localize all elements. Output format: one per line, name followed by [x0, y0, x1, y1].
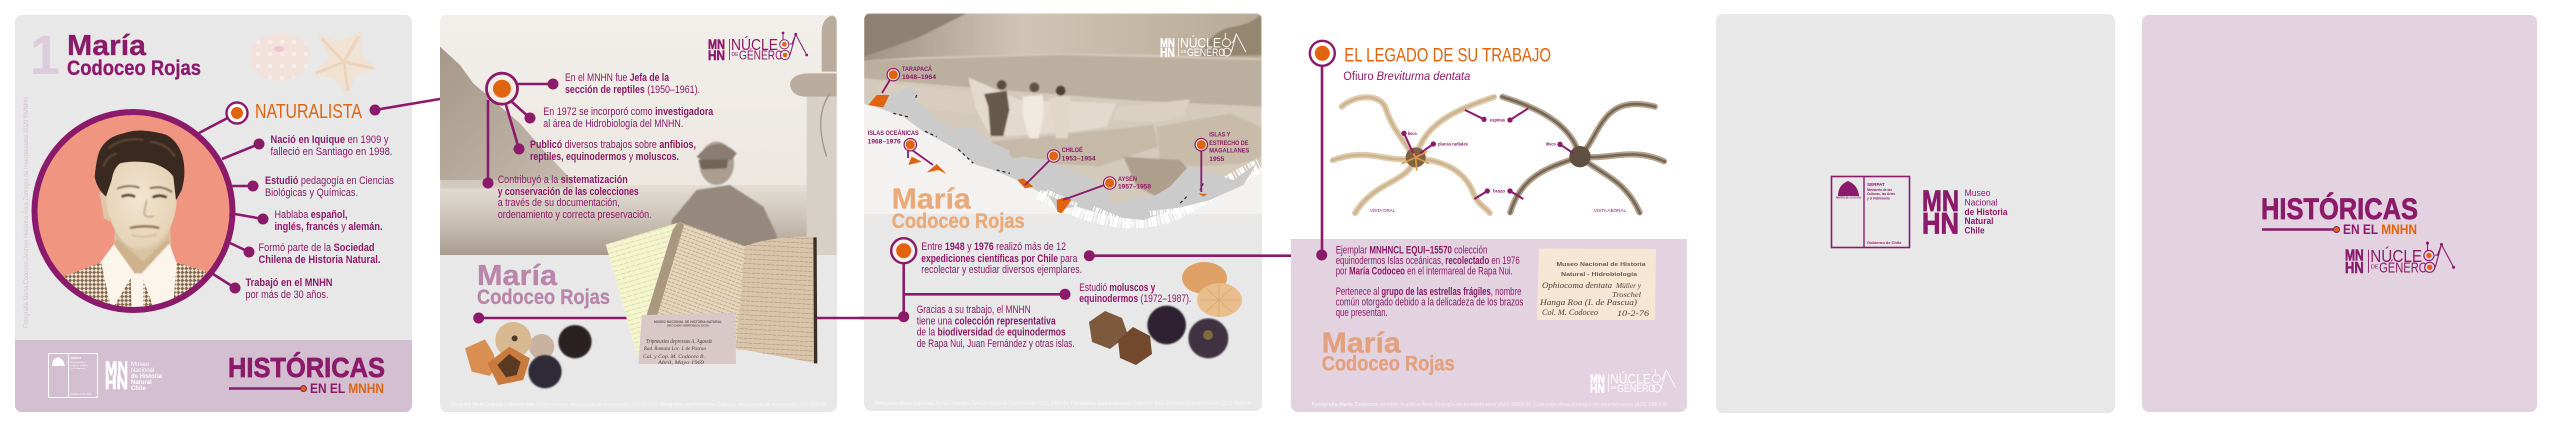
- text: head of section: sección de reptiles (1950–1961).: [565, 84, 700, 96]
- name: María Codoceo Rojas: Codoceo Rojas: [1322, 352, 1455, 376]
- target marker: [1310, 41, 1335, 66]
- text: languages: [274, 209, 382, 233]
- name: María Codoceo Rojas: María: [1322, 327, 1402, 359]
- marker: Islas Oceánicas: 1968–1976: [868, 139, 901, 145]
- anatomy callout lines: [1402, 108, 1573, 199]
- connector lines: [488, 84, 552, 183]
- catalog card: SECCION HIDROBIOLOGIA: [667, 324, 710, 328]
- map connector lines: [882, 75, 1201, 200]
- logo: Serpat: Culturas, las Artes: [1867, 192, 1895, 196]
- brows, eyes, nose, mouth: [117, 186, 172, 237]
- anatomy labels: espinas: [1490, 118, 1506, 122]
- title: María Codoceo Rojas: [67, 30, 201, 80]
- number 1: 1: [30, 23, 60, 86]
- catalog card: Rad. Romaza Loc. I. de Pascua: [643, 346, 706, 352]
- logo: MNHN white: HN: [105, 373, 128, 394]
- wordmark: Históricas en el MNHN: HISTÓRICAS: [228, 352, 385, 383]
- text: specimen: [1336, 244, 1520, 278]
- text: birth: [270, 134, 392, 158]
- logo: MNHN white: [105, 359, 163, 394]
- marker: Tarapacá: TARAPACÁ: [902, 66, 933, 73]
- marker: Tarapacá: [887, 66, 937, 81]
- connector to next panel: [479, 317, 903, 319]
- text: collection: tiene una colección representativa: [917, 315, 1056, 327]
- logo: MNHN white: Natural: [131, 380, 152, 386]
- name: María Codoceo Rojas: [477, 260, 610, 309]
- text: studies: Biológicas y Químicas.: [265, 187, 358, 199]
- jacket: [64, 262, 206, 304]
- marker: Aysén: AYSÉN: [1118, 175, 1137, 183]
- wordmark: Históricas en el MNHN: [228, 352, 385, 396]
- photo credit: Fotografía María Codoceo: Archivo Histórico Área Zoología de Invertebrados 0020 ®MNHN: [23, 97, 30, 328]
- logo: Núcleo de Género white: HN: [1160, 45, 1175, 59]
- logo: MNHN: Chile: [1964, 224, 1984, 236]
- logo: Serpat white: Ministerio de las: [70, 361, 87, 364]
- text: society: Formó parte de la Sociedad: [258, 242, 374, 254]
- logo: Núcleo de Género white: [1590, 369, 1676, 395]
- text: publications: Publicó diversos trabajos sobre anfibios,: [530, 139, 696, 151]
- specimen label card: [1537, 248, 1656, 320]
- background photo: [864, 13, 1262, 220]
- marker: Islas y Estrecho de Magallanes: [1195, 133, 1249, 163]
- panel: closing wordmark: [2142, 15, 2537, 412]
- logo: MNHN white: Museo: [131, 362, 150, 368]
- connector line: [1321, 60, 1323, 255]
- logo: MNHN white: de Historia: [131, 374, 163, 380]
- ear: [99, 192, 110, 222]
- logo: Núcleo de Género: [708, 32, 808, 63]
- logo: MNHN white: Nacional: [131, 368, 154, 374]
- photo credit: Fotografía María Codoceo: Archivo Histórico Área Zoología de Invertebrados (AZI) ®MNHN. Colección Área Zoología de Invertebrados (AZI) ®MNHN: [1312, 401, 1668, 408]
- text: collections: [498, 174, 652, 221]
- logo: Núcleo de Género: GÉNERO: [2379, 259, 2427, 276]
- logo: Serpat: SERPAT: [1867, 182, 1885, 187]
- name: María Codoceo Rojas: [1322, 327, 1455, 376]
- text: birth: Nació en Iquique en 1909 y: [270, 134, 389, 146]
- logo: Núcleo de Género white: MN: [1590, 372, 1605, 386]
- catalog card: [643, 320, 722, 366]
- logo: Serpat white: Culturas, las Artes: [70, 364, 89, 367]
- specimen label card: Natural - Hidrobiología: [1561, 272, 1638, 278]
- title: María Codoceo Rojas: Codoceo Rojas: [67, 57, 201, 80]
- logo: Serpat white: Gobierno de Chile: [70, 392, 92, 396]
- text: researcher: En 1972 se incorporó como investigadora: [543, 106, 714, 118]
- text: specimen: Ejemplar MNHNCL EQUI–15570 colección: [1336, 244, 1487, 256]
- text: society: Chilena de Historia Natural.: [258, 254, 380, 266]
- marker: Aysén: [1104, 175, 1152, 191]
- marker: Chiloé: CHILOÉ: [1062, 146, 1083, 154]
- specimen label card: Hanga Roa (I. de Pascua): [1539, 298, 1637, 307]
- text: studies: [265, 175, 394, 199]
- text: molluscs: equinodermos (1972–1987).: [1079, 293, 1191, 305]
- logo: Serpat: y el Patrimonio: [1867, 196, 1890, 200]
- logo: Núcleo de Género: HN: [2345, 260, 2364, 277]
- text: brittle stars: Pertenece al grupo de las estrellas frágiles, nombre: [1336, 286, 1521, 298]
- catalog card: Tripneustes depressus A. Agassiz: [646, 338, 712, 345]
- logo: Serpat: Gobierno de Chile: [1867, 240, 1902, 245]
- logo: Serpat: [1832, 176, 1910, 248]
- text: languages: Hablaba español,: [274, 209, 348, 221]
- logo: Núcleo de Género white: NÚCLE: [1610, 371, 1651, 387]
- icon: starfish: [313, 33, 376, 95]
- catalog card: Abril, Mayo 1969: [657, 360, 704, 366]
- connector dot: [1316, 250, 1327, 260]
- panel: biography: [15, 15, 487, 412]
- person silhouette: [672, 142, 777, 255]
- wordmark: Históricas en el MNHN: HISTÓRICAS: [2261, 192, 2418, 226]
- panel: legacy: [1291, 41, 1687, 412]
- logo: Núcleo de Género white: HN: [1590, 381, 1605, 395]
- text: languages: inglés, francés y alemán.: [274, 221, 382, 233]
- text: brittle stars: común otorgado debido a la delicadeza de los brazos: [1336, 296, 1524, 308]
- text: society: [258, 242, 380, 266]
- specimen label card: Col. M. Codoceo: [1542, 308, 1598, 317]
- view labels: [1370, 208, 1626, 213]
- logo: Núcleo de Género white: GÉNERO: [1187, 46, 1225, 59]
- text: researcher: [543, 106, 714, 130]
- panel: career: [440, 15, 903, 412]
- face: [106, 161, 177, 252]
- text: publications: reptiles, equinodermos y moluscos.: [530, 151, 679, 163]
- text: collection: [917, 304, 1075, 350]
- text: collection: de la biodiversidad de equinodermos: [917, 327, 1066, 339]
- text: specimen: equinodermos Islas oceánicas, recolectado en 1976: [1336, 255, 1520, 267]
- text: years at MNHN: Trabajó en el MNHN: [246, 277, 333, 289]
- catalog card: MUSEO NACIONAL DE HISTORIA NATURAL: [654, 320, 722, 324]
- neck: [114, 228, 172, 266]
- blouse: [101, 243, 177, 312]
- connector dot: [473, 312, 484, 324]
- logo: MNHN: MN: [1922, 185, 1959, 218]
- heading: EL LEGADO DE SU TRABAJO: [1344, 45, 1551, 67]
- anatomy labels: disco: [1546, 142, 1556, 146]
- specimen label card: Ophiocoma dentata: [1542, 280, 1612, 290]
- name: María Codoceo Rojas: Codoceo Rojas: [892, 210, 1025, 233]
- logo: Núcleo de Género: DE: [732, 52, 739, 58]
- logo: Núcleo de Género: [2345, 242, 2455, 277]
- marker: Islas y Estrecho de Magallanes: ISLAS Y: [1209, 133, 1230, 139]
- logo: Núcleo de Género: HN: [708, 47, 725, 63]
- marker: Chiloé: 1953–1954: [1062, 156, 1096, 162]
- neck shadow: [114, 238, 169, 273]
- text: brittle stars: que presentan.: [1336, 307, 1388, 319]
- tie pattern: [114, 278, 153, 307]
- logo: MNHN: Nacional: [1964, 196, 1998, 208]
- text: head of section: En el MNHN fue Jefa de la: [565, 72, 670, 84]
- text: expeditions: Entre 1948 y 1976 realizó más de 12: [921, 241, 1066, 253]
- echinoderm specimens: [1089, 262, 1242, 365]
- logo: MNHN: Museo: [1964, 187, 1990, 198]
- name: María Codoceo Rojas: [892, 183, 1025, 233]
- target marker: [486, 73, 518, 104]
- wordmark: Históricas en el MNHN: EN EL MNHN: [310, 380, 384, 396]
- icon: sea urchin: [249, 33, 311, 81]
- marker: Islas y Estrecho de Magallanes: MAGALLANES: [1209, 149, 1249, 155]
- hair highlights: [103, 139, 175, 167]
- logo: Serpat: Ministerio de las: [1867, 188, 1892, 192]
- name: María Codoceo Rojas: María: [477, 260, 558, 292]
- marker: Islas Oceánicas: ISLAS OCEÁNICAS: [868, 130, 919, 137]
- view labels: VISTA ORAL: [1370, 208, 1395, 213]
- logo: MNHN: HN: [1922, 208, 1959, 240]
- title: María Codoceo Rojas: María: [67, 30, 147, 62]
- text: years at MNHN: por más de 30 años.: [246, 289, 328, 301]
- marker: Aysén: 1957–1958: [1118, 185, 1152, 191]
- panel: institutional logos: [1716, 14, 2115, 413]
- text: collections: y conservación de las colecciones: [498, 186, 639, 198]
- text: birth: falleció en Santiago en 1998.: [270, 146, 392, 158]
- documents: [606, 222, 817, 366]
- logo: Núcleo de Género: MN: [2345, 248, 2364, 265]
- specimen: oral view: [1332, 97, 1495, 213]
- logo: Serpat white: SERPAT: [70, 356, 82, 360]
- specimen label card: Troschel: [1612, 290, 1641, 299]
- text: expeditions: expediciones científicas por Chile para: [921, 253, 1078, 265]
- name: María Codoceo Rojas: Codoceo Rojas: [477, 286, 610, 309]
- text: molluscs: Estudió moluscos y: [1079, 282, 1156, 294]
- logo: Núcleo de Género white: DE: [1610, 385, 1617, 390]
- text: collection: de Rapa Nui, Juan Fernández y otras islas.: [917, 338, 1075, 350]
- wordmark: Históricas en el MNHN: [2261, 192, 2418, 237]
- portrait: [34, 112, 232, 312]
- logo: Serpat white: y el Patrimonio: [70, 367, 86, 370]
- boat structures: [807, 97, 837, 255]
- background photo: [440, 15, 837, 255]
- logo: Núcleo de Género white: MN: [1160, 36, 1175, 50]
- text: collections: Contribuyó a la sistematización: [498, 174, 628, 186]
- logo: Núcleo de Género white: [1160, 33, 1246, 59]
- logo: Núcleo de Género: DE: [2371, 264, 2379, 270]
- connector dots: [230, 104, 380, 294]
- text: expeditions: recolectar y estudiar diversos ejemplares.: [921, 264, 1082, 276]
- text: publications: [530, 139, 696, 163]
- wordmark: Históricas en el MNHN: EN EL MNHN: [2343, 221, 2417, 237]
- marker: Tarapacá: 1948–1964: [902, 75, 937, 81]
- logo: Núcleo de Género: GÉNERO: [739, 48, 783, 62]
- specimen label card: Müller y: [1615, 281, 1642, 290]
- heading: NATURALISTA: NATURALISTA: [255, 100, 362, 123]
- target marker: [226, 102, 248, 124]
- logo: MNHN: de Historia: [1964, 206, 2008, 217]
- logo: MNHN: [1922, 185, 2008, 240]
- anatomy labels: boca: [1408, 131, 1417, 136]
- logo: Núcleo de Género: NÚCLE: [731, 35, 778, 54]
- panel: expeditions: [860, 13, 1322, 411]
- anatomy labels: [1408, 118, 1556, 194]
- text: expeditions: [921, 241, 1082, 276]
- marker: Chiloé: [1048, 146, 1096, 162]
- marker: Islas Oceánicas: [868, 130, 919, 151]
- text: collections: ordenamiento y correcta preservación.: [498, 209, 652, 221]
- text: specimen: por María Codoceo en el intermareal de Rapa Nui.: [1336, 266, 1513, 278]
- specimen: aboral view: [1502, 97, 1665, 213]
- connector lines: [860, 255, 1322, 318]
- photo credit: Fotografía María Codoceo: Archivo Histórico Área Zoología de Invertebrados (AZI) ®MNHN. Fotografías equinodermos: Colección Área Zoología de Invertebrados (AZI) ®MNHN: [875, 400, 1251, 407]
- logo: Serpat white: [48, 354, 98, 398]
- text: researcher: al área de Hidrobiología del MNHN.: [543, 118, 683, 130]
- echinoderm specimens: [465, 322, 592, 388]
- map of Chile: [866, 87, 1262, 225]
- logo: Núcleo de Género white: DE: [1180, 49, 1187, 54]
- specimen label card: 10-2-76: [1617, 309, 1649, 318]
- text: collection: Gracias a su trabajo, el MNHN: [917, 304, 1031, 316]
- connector dots: [898, 250, 1095, 322]
- subheading: Ofiuro Breviturma dentata: [1343, 71, 1470, 83]
- anatomy labels: placas radiales: [1438, 142, 1469, 146]
- text: brittle stars: [1336, 286, 1524, 319]
- target marker: [891, 238, 916, 263]
- text: molluscs: [1079, 282, 1191, 305]
- logo: MNHN: Natural: [1964, 215, 1994, 226]
- logo: Núcleo de Género white: GÉNERO: [1617, 382, 1655, 395]
- logo: MNHN white: Chile: [131, 386, 146, 392]
- photo credit: Fotografía María Codoceo y documentos: Archivo Histórico Área Zoología de Invertebrados (AZI) ®MNHN. Fotografías equinodermos: Colección Área Zoología de Invertebrados (AZI) ®MNHN: [450, 401, 826, 408]
- logo: Núcleo de Género: NÚCLE: [2370, 245, 2422, 266]
- marker: Islas y Estrecho de Magallanes: 1955: [1209, 157, 1225, 163]
- catalog card: Cal. y Cop. M. Codoceo R.: [643, 354, 705, 360]
- text: collections: a través de su documentación,: [498, 197, 620, 209]
- logo: Núcleo de Género: MN: [708, 36, 725, 52]
- connector dots: [482, 78, 558, 188]
- text: studies: Estudió pedagogía en Ciencias: [265, 175, 394, 187]
- connector lines: [199, 91, 487, 288]
- text: years at MNHN: [246, 277, 333, 301]
- view labels: VISTA ABORAL: [1594, 208, 1626, 213]
- name: María Codoceo Rojas: María: [892, 183, 972, 215]
- logo: Serpat: MINISTERIO DE LAS CULTURAS: [1836, 196, 1861, 200]
- marker: Islas y Estrecho de Magallanes: ESTRECHO DE: [1209, 141, 1248, 147]
- logo: MNHN white: MN: [105, 359, 128, 380]
- logo: Núcleo de Género white: NÚCLE: [1180, 35, 1221, 51]
- specimen label card: Museo Nacional de Historia: [1556, 262, 1647, 268]
- anatomy labels: brazo: [1493, 188, 1505, 194]
- text: head of section: [565, 72, 700, 96]
- hair: [95, 131, 184, 200]
